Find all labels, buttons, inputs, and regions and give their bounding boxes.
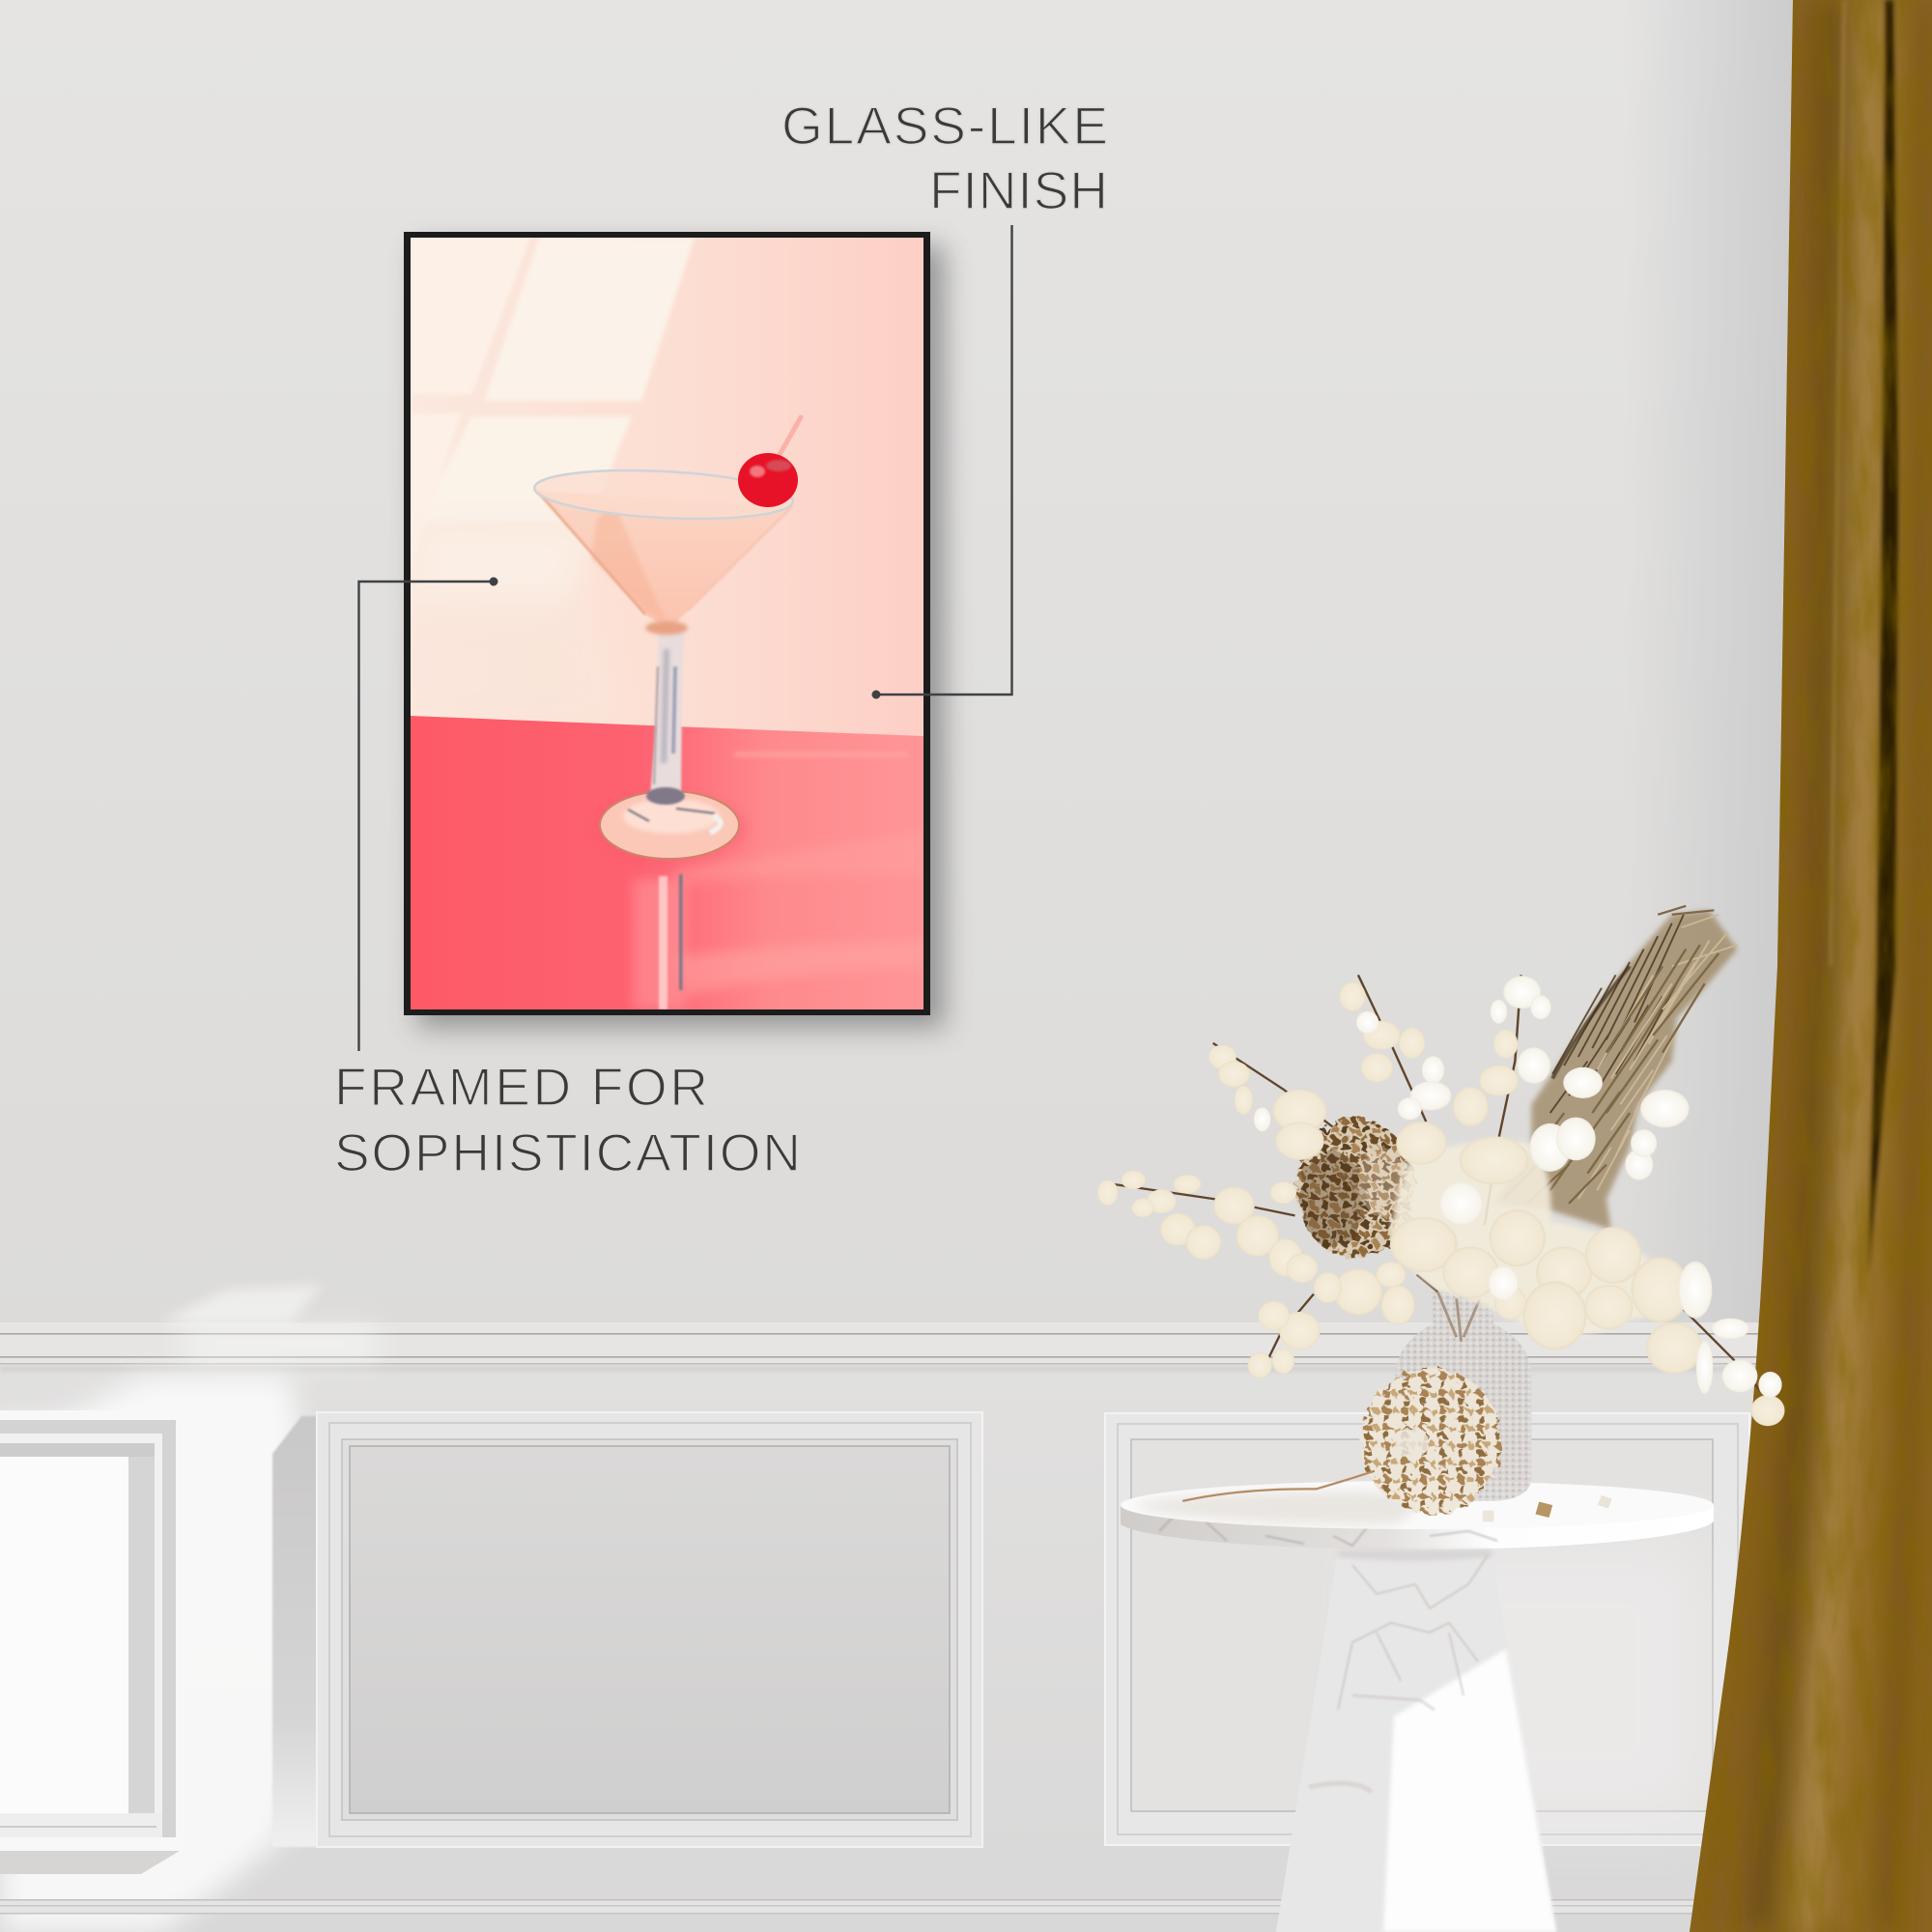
painting back wall — [411, 238, 923, 740]
leader dot — [489, 578, 498, 585]
table top surface — [1121, 1481, 1714, 1529]
cream honesty leaves — [1097, 981, 1785, 1426]
table leg — [1276, 1546, 1556, 1932]
panel: left moulding — [0, 1410, 186, 1851]
shadow beside centre panel — [272, 1416, 319, 1847]
big hydrangea — [1296, 1119, 1416, 1259]
panel: centre moulding — [317, 1412, 982, 1847]
window light — [412, 238, 694, 599]
central leaf mass — [1391, 1141, 1672, 1335]
pampas feather — [1494, 906, 1738, 1230]
feather light strands — [1578, 915, 1738, 1199]
framed artwork — [404, 232, 930, 1015]
table top rim — [1121, 1505, 1714, 1549]
sunlight wedge above rail — [159, 1285, 324, 1322]
marble side table — [1121, 1481, 1714, 1932]
table brush strokes — [676, 752, 923, 995]
fallen petals — [1483, 1495, 1612, 1521]
hydrangea on table — [1360, 1368, 1501, 1513]
wall background — [0, 0, 1932, 1352]
callout label second line: FINISH — [929, 160, 1108, 220]
dried flower branches — [1097, 975, 1785, 1521]
feather plume body — [1494, 910, 1738, 1230]
artwork frame shadow — [417, 245, 945, 1028]
rim veins — [1159, 1512, 1497, 1546]
label text: FRAMED FOR — [334, 1057, 708, 1117]
callout: glass-like finish — [781, 96, 1108, 699]
glass bowl — [533, 465, 794, 635]
painting — [411, 238, 923, 1009]
stems — [1113, 975, 1761, 1391]
callout label second line: SOPHISTICATION — [334, 1122, 801, 1182]
label text: GLASS-LIKE — [781, 96, 1108, 156]
feather dark strands — [1550, 915, 1684, 1113]
leader line — [876, 225, 1012, 695]
velvet texture — [1690, 0, 1932, 1932]
glass vase — [1396, 1292, 1531, 1501]
glass reflection — [633, 874, 686, 1009]
curtain folds — [1715, 0, 1918, 1932]
curtain — [1690, 0, 1932, 1932]
feather mid strands — [1503, 906, 1719, 1204]
chair rail moulding — [0, 1322, 1932, 1372]
sunlight on rail — [184, 1325, 377, 1362]
frame — [404, 232, 930, 1015]
painted table — [411, 716, 923, 1009]
glass stem — [646, 630, 685, 805]
leader line — [359, 582, 494, 1051]
white honesty leaves — [1254, 976, 1782, 1398]
curtain dark gap — [1868, 0, 1898, 1275]
dried stem on table — [1182, 1471, 1375, 1501]
panel: right moulding — [1105, 1413, 1749, 1845]
skirting moulding — [0, 1899, 1932, 1915]
stems in vase — [1437, 1292, 1480, 1342]
surface marble tint — [1140, 1492, 1413, 1524]
table shadow on leg — [1337, 1549, 1493, 1561]
glass foot — [592, 791, 747, 862]
feather spine — [1552, 966, 1630, 1078]
wainscot lower wall — [0, 1285, 1932, 1932]
cherry — [738, 417, 801, 507]
leader dot — [871, 690, 881, 699]
sunlight patch on lower wall — [0, 1377, 311, 1932]
callout: framed for sophistication — [334, 578, 708, 1117]
shadow under left panel — [0, 1851, 180, 1874]
